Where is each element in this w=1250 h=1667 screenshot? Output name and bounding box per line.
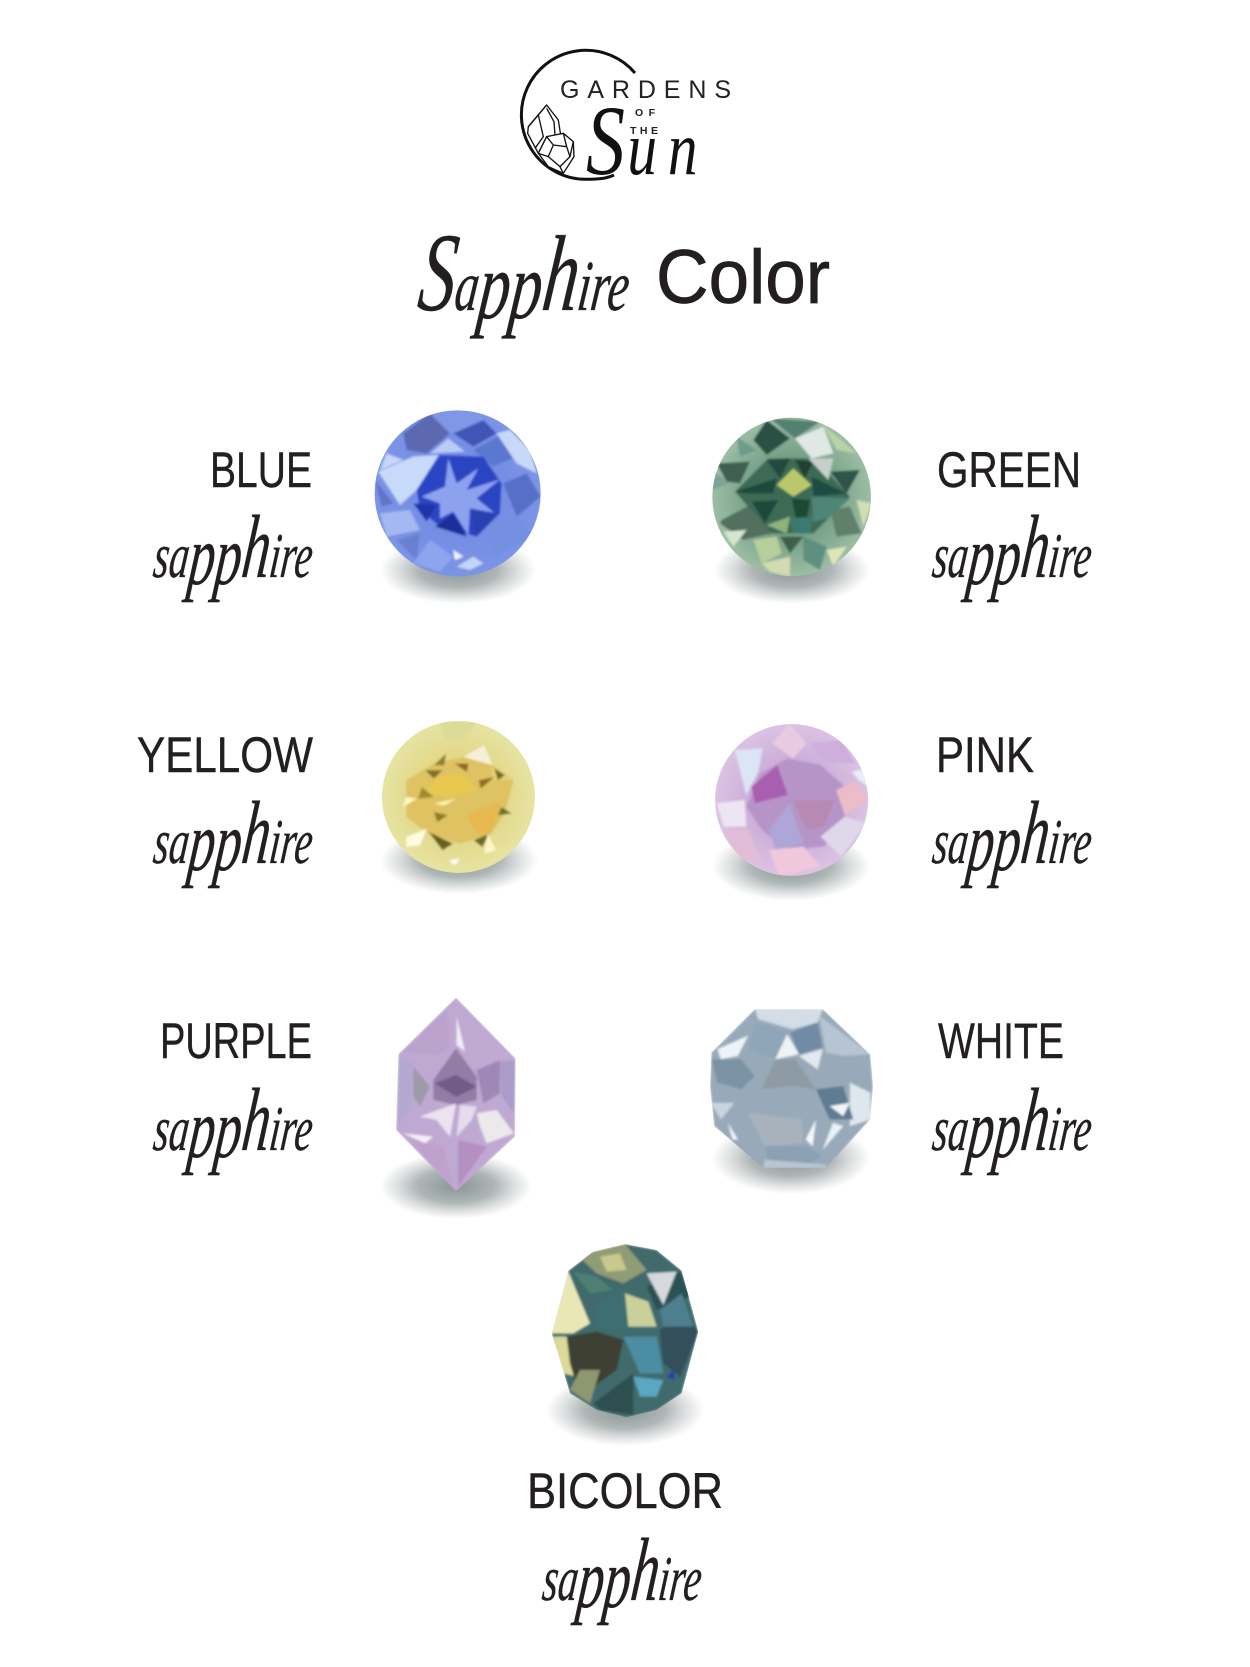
script: sapphire: sa xyxy=(150,806,194,877)
script: sapphire: pp xyxy=(181,510,247,603)
icon: white octagonal gem xyxy=(710,1009,873,1168)
panel: purple sapphire xyxy=(149,997,532,1219)
icon: yellow round gem xyxy=(380,719,537,875)
script: sapphire: sa xyxy=(929,1093,973,1164)
script: sapphire: ire xyxy=(266,1093,317,1164)
title sans word: Color xyxy=(656,235,830,320)
script: sapphire: h xyxy=(1017,784,1056,883)
script: sapphire: ire xyxy=(1045,520,1096,591)
label: YELLOW: YELLOW xyxy=(137,727,314,783)
label: PURPLE: PURPLE xyxy=(160,1013,312,1069)
panel: pink sapphire xyxy=(712,722,1098,901)
logo: Gardens of the Sun xyxy=(521,50,731,196)
label: PINK: PINK xyxy=(936,727,1034,783)
script: sapphire: ire xyxy=(266,806,317,877)
script: sapphire: h xyxy=(238,498,277,597)
script: sapphire: sa xyxy=(150,1093,194,1164)
logo wordmark: GARDENS: GARDENS xyxy=(560,76,731,104)
script: sapphire: pp xyxy=(960,1083,1026,1176)
logo wordmark: THE: THE xyxy=(630,125,658,137)
script: sapphire: h xyxy=(238,1071,277,1170)
infographic: sapphire color guide xyxy=(138,48,1092,1626)
script: sapphire: pp xyxy=(960,796,1026,889)
label: GREEN: GREEN xyxy=(937,442,1081,498)
icon: green round gem xyxy=(710,415,873,579)
icon: gem shadow xyxy=(712,1122,870,1194)
icon: crystals xyxy=(528,105,574,173)
script: sapphire: sa xyxy=(150,520,194,591)
script: sapphire: sa xyxy=(929,806,973,877)
script: sapphire: ire xyxy=(266,520,317,591)
script: sapphire: h xyxy=(1017,1071,1056,1170)
label: BICOLOR: BICOLOR xyxy=(527,1463,723,1519)
icon: purple hexagonal gem xyxy=(396,997,516,1192)
script: sapphire: h xyxy=(238,784,277,883)
script: sapphire: sa xyxy=(929,520,973,591)
logo wordmark: Sun: Sun xyxy=(586,86,708,196)
script: sapphire: h xyxy=(1017,498,1056,597)
script: sapphire: ire xyxy=(1045,1093,1096,1164)
icon: gem shadow xyxy=(546,1374,704,1446)
icon: gem shadow xyxy=(380,1153,532,1219)
title xyxy=(413,210,830,339)
script: sapphire: pp xyxy=(181,796,247,889)
title script word: ire xyxy=(574,247,634,326)
panel: white sapphire xyxy=(710,1009,1098,1194)
icon: gem shadow xyxy=(380,536,536,604)
icon: gem shadow xyxy=(380,826,538,894)
panel: blue sapphire xyxy=(149,408,543,604)
panel: bicolor sapphire xyxy=(527,1244,723,1626)
logo wordmark: OF: OF xyxy=(635,107,656,119)
script: sapphire: pp xyxy=(570,1533,636,1626)
title script word: Sa xyxy=(413,210,484,335)
label: WHITE: WHITE xyxy=(938,1013,1064,1069)
script: sapphire: pp xyxy=(960,510,1026,603)
label: BLUE: BLUE xyxy=(210,442,312,498)
script: sapphire: sa xyxy=(539,1543,583,1614)
script: sapphire: pp xyxy=(181,1083,247,1176)
script: sapphire: ire xyxy=(655,1543,706,1614)
panel: green sapphire xyxy=(710,415,1098,604)
icon: gem shadow xyxy=(714,536,870,604)
icon: blue round gem xyxy=(373,408,543,578)
script: sapphire: ire xyxy=(1045,806,1096,877)
title script word: h xyxy=(537,214,587,333)
icon: gem shadow xyxy=(712,831,870,901)
icon: bicolor gem xyxy=(552,1244,698,1417)
panel: yellow sapphire xyxy=(137,719,538,894)
title script word: pp xyxy=(469,232,549,339)
script: sapphire: h xyxy=(627,1521,666,1620)
icon: pink round gem xyxy=(713,722,870,878)
logo ring xyxy=(521,50,635,179)
